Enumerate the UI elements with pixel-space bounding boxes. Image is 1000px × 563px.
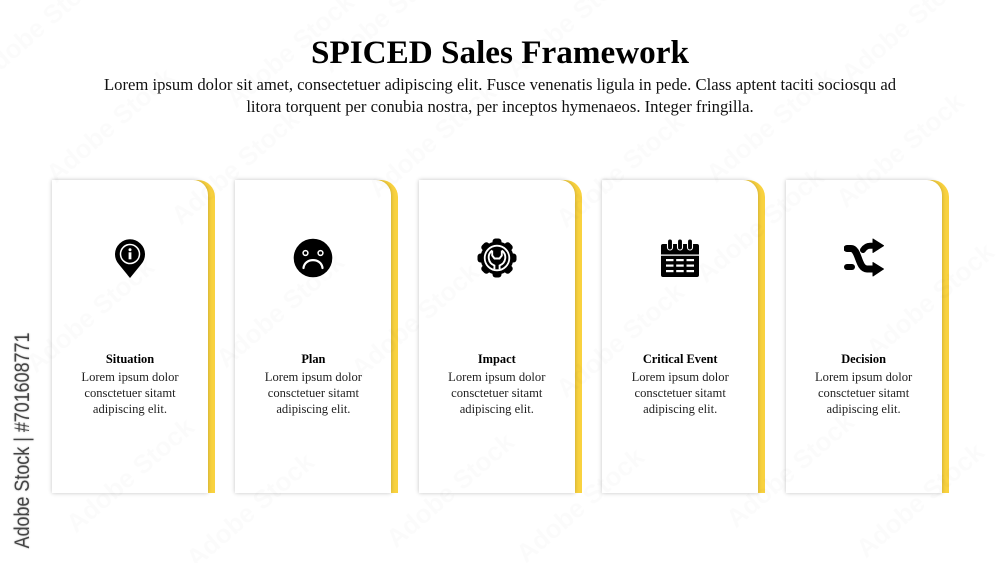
card text: Critical Event bbox=[632, 352, 729, 416]
card text: Plan bbox=[265, 352, 362, 416]
icon: location pin with info bbox=[115, 239, 145, 278]
watermark pattern: Adobe Stock bbox=[210, 247, 350, 373]
card text: Situation: adipiscing elit. bbox=[93, 402, 167, 416]
panel: Impact bbox=[416, 178, 582, 496]
card text: Critical Event: adipiscing elit. bbox=[643, 402, 717, 416]
card text: Plan: Plan bbox=[301, 352, 325, 366]
card text: Decision: Decision bbox=[841, 352, 886, 366]
card text: Impact: Lorem ipsum dolor bbox=[448, 370, 545, 384]
watermark pattern: Adobe Stock bbox=[40, 62, 180, 188]
icon: sad face bbox=[294, 238, 332, 278]
title: SPICED Sales Framework bbox=[311, 34, 689, 71]
watermark pattern: Adobe Stock bbox=[165, 104, 305, 230]
panel: Decision bbox=[784, 178, 949, 496]
panel: Critical Event bbox=[600, 178, 765, 496]
watermark pattern: Adobe Stock bbox=[550, 107, 690, 233]
watermark pattern: Adobe Stock bbox=[20, 252, 160, 378]
watermark pattern: Adobe Stock bbox=[550, 277, 690, 403]
watermark pattern: Adobe Stock bbox=[860, 237, 1000, 363]
watermark pattern: Adobe Stock bbox=[720, 407, 860, 533]
card text: Impact bbox=[448, 352, 546, 416]
intro text: Lorem ipsum dolor sit amet, consectetuer adipiscing elit. Fusce venenatis ligula in pede. Class aptent taciti sociosqu ad litora torquent per conubia nostra, per inceptos hymenaeos. Integer fringilla. bbox=[104, 75, 896, 116]
card text: Situation: consctetuer sitamt bbox=[84, 386, 176, 400]
card text: Impact: adipiscing elit. bbox=[460, 402, 534, 416]
card text: Decision bbox=[815, 352, 912, 416]
card text: Situation bbox=[81, 352, 179, 416]
watermark pattern: Adobe Stock bbox=[850, 437, 990, 563]
card text: Critical Event: consctetuer sitamt bbox=[635, 386, 726, 400]
card text: Impact: Impact bbox=[478, 352, 516, 366]
icon: gear with wrench bbox=[478, 238, 516, 278]
watermark pattern: Adobe Stock bbox=[700, 62, 840, 188]
watermark pattern: Adobe Stock bbox=[380, 427, 520, 553]
watermark: stock ID: Adobe Stock | #701608771 bbox=[11, 332, 34, 548]
icon: shuffle arrows bbox=[844, 238, 884, 276]
card text: Critical Event: Critical Event bbox=[643, 352, 718, 366]
card text: Plan: consctetuer sitamt bbox=[268, 386, 359, 400]
card text: Critical Event: Lorem ipsum dolor bbox=[632, 370, 729, 384]
watermark pattern: Adobe Stock bbox=[362, 77, 502, 203]
watermark pattern: Adobe Stock bbox=[60, 412, 200, 538]
icon: calendar bbox=[661, 240, 699, 277]
card text: Situation: Lorem ipsum dolor bbox=[81, 370, 179, 384]
card text: Decision: Lorem ipsum dolor bbox=[815, 370, 912, 384]
card text: Plan: Lorem ipsum dolor bbox=[265, 370, 362, 384]
panel: Situation bbox=[50, 178, 215, 496]
watermark pattern: Adobe Stock bbox=[690, 162, 830, 288]
watermark pattern: Adobe Stock bbox=[345, 257, 485, 383]
card text: Decision: adipiscing elit. bbox=[827, 402, 901, 416]
card text: Decision: consctetuer sitamt bbox=[818, 386, 909, 400]
panel: Plan bbox=[232, 178, 398, 496]
watermark pattern: Adobe Stock bbox=[830, 87, 970, 213]
card text: Situation: Situation bbox=[106, 352, 154, 366]
card text: Impact: consctetuer sitamt bbox=[451, 386, 542, 400]
card text: Plan: adipiscing elit. bbox=[276, 402, 350, 416]
